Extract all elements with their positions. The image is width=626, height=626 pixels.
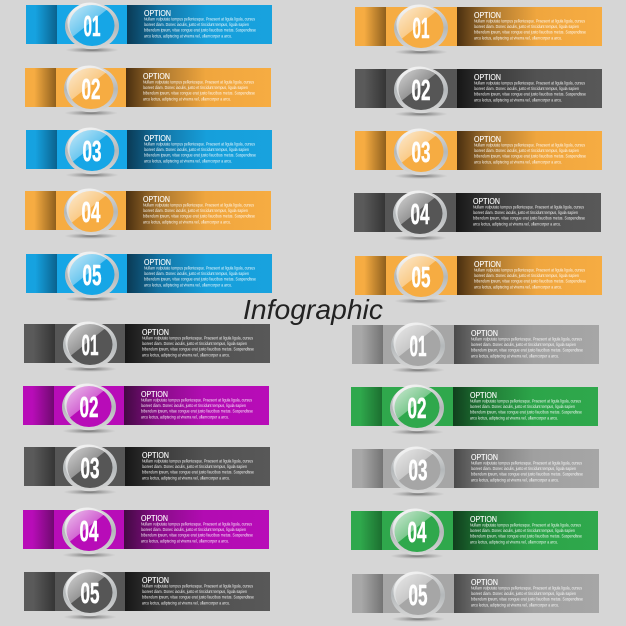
ribbon	[26, 5, 272, 44]
banner: gray 05 right	[352, 571, 599, 622]
badge shadow	[65, 296, 119, 302]
text block: arcu lectus, adipiscing at viverra vel, ullamcorper a arcu.	[144, 33, 232, 38]
text block	[474, 73, 586, 102]
text block	[474, 11, 586, 40]
ribbon	[23, 510, 269, 549]
number badge: 01	[82, 330, 98, 362]
text block: Nullam vulputate tempus pellentesque. Praesent at ligula ligula, cursus	[474, 80, 586, 85]
text block: OPTION	[470, 391, 497, 400]
text block: arcu lectus, adipiscing at viverra vel, ullamcorper a arcu.	[142, 600, 230, 605]
number badge	[394, 66, 448, 113]
banner: green 04 right	[351, 508, 598, 559]
ribbon	[354, 193, 601, 232]
ribbon	[352, 449, 599, 488]
banner: blue 01	[26, 2, 272, 53]
text block: bibendum ipsum, vitae congue erat justo faucibus metus. Suspendisse	[471, 348, 583, 353]
number badge: 04	[410, 199, 430, 231]
number badge: 01	[410, 331, 426, 363]
text block	[143, 195, 255, 224]
text block: laoreet diam. Donec iaculis, justo et tincidunt tempus, ligula sapien	[144, 147, 249, 152]
text block	[470, 515, 582, 544]
number badge: 04	[80, 516, 98, 548]
text block: arcu lectus, adipiscing at viverra vel, ullamcorper a arcu.	[143, 219, 231, 224]
text block: Nullam vulputate tempus pellentesque. Praesent at ligula ligula, cursus	[474, 142, 586, 147]
number badge	[62, 383, 116, 430]
number badge: 03	[408, 455, 428, 487]
number badge	[391, 322, 445, 369]
ribbon	[24, 447, 270, 486]
text block: OPTION	[471, 578, 498, 587]
text block: OPTION	[474, 73, 501, 82]
text block: bibendum ipsum, vitae congue erat justo faucibus metus. Suspendisse	[144, 28, 256, 33]
text block: bibendum ipsum, vitae congue erat justo faucibus metus. Suspendisse	[474, 30, 586, 35]
banner: purple 02	[23, 383, 269, 434]
banner: orange 03 right	[355, 128, 602, 179]
text block: arcu lectus, adipiscing at viverra vel, ullamcorper a arcu.	[474, 284, 562, 289]
ribbon	[351, 511, 598, 550]
badge shadow	[394, 111, 448, 117]
text block: Nullam vulputate tempus pellentesque. Praesent at ligula ligula, cursus	[142, 458, 254, 463]
text block: arcu lectus, adipiscing at viverra vel, ullamcorper a arcu.	[141, 538, 229, 543]
number badge: 02	[82, 74, 100, 106]
text block: arcu lectus, adipiscing at viverra vel, ullamcorper a arcu.	[141, 414, 229, 419]
text block: OPTION	[470, 515, 497, 524]
text block: Nullam vulputate tempus pellentesque. Praesent at ligula ligula, cursus	[144, 16, 256, 21]
badge shadow	[62, 428, 116, 434]
number badge: 01	[412, 13, 430, 45]
text block	[141, 514, 253, 543]
badge shadow	[63, 614, 117, 620]
text block: bibendum ipsum, vitae congue erat justo faucibus metus. Suspendisse	[473, 216, 585, 221]
number badge: 04	[408, 517, 426, 549]
banner: charcoal 04 right	[354, 190, 601, 241]
number badge	[393, 190, 447, 237]
text block: arcu lectus, adipiscing at viverra vel, ullamcorper a arcu.	[474, 35, 562, 40]
banner: charcoal 03	[24, 444, 270, 495]
text block: OPTION	[144, 9, 171, 18]
text block: OPTION	[143, 195, 170, 204]
banner: green 02 right	[351, 384, 598, 435]
text block: laoreet diam. Donec iaculis, justo et tincidunt tempus, ligula sapien	[474, 24, 579, 29]
text block: Nullam vulputate tempus pellentesque. Praesent at ligula ligula, cursus	[471, 460, 583, 465]
text block: Nullam vulputate tempus pellentesque. Praesent at ligula ligula, cursus	[470, 522, 582, 527]
number badge: 01	[84, 11, 100, 43]
number badge: 05	[408, 580, 428, 612]
text block: OPTION	[142, 328, 169, 337]
ribbon	[25, 68, 271, 107]
number badge: 05	[80, 578, 100, 610]
text block: bibendum ipsum, vitae congue erat justo faucibus metus. Suspendisse	[144, 277, 256, 282]
text block: laoreet diam. Donec iaculis, justo et tincidunt tempus, ligula sapien	[143, 208, 248, 213]
text block: bibendum ipsum, vitae congue erat justo faucibus metus. Suspendisse	[142, 347, 254, 352]
ribbon	[23, 386, 269, 425]
text block: laoreet diam. Donec iaculis, justo et tincidunt tempus, ligula sapien	[471, 342, 576, 347]
badge shadow	[63, 366, 117, 372]
text block: laoreet diam. Donec iaculis, justo et tincidunt tempus, ligula sapien	[471, 466, 576, 471]
text block: arcu lectus, adipiscing at viverra vel, ullamcorper a arcu.	[471, 353, 559, 358]
badge shadow	[391, 616, 445, 622]
text block: OPTION	[144, 258, 171, 267]
text block: arcu lectus, adipiscing at viverra vel, ullamcorper a arcu.	[470, 539, 558, 544]
text block: arcu lectus, adipiscing at viverra vel, ullamcorper a arcu.	[473, 221, 561, 226]
text block: arcu lectus, adipiscing at viverra vel, ullamcorper a arcu.	[143, 96, 231, 101]
badge shadow	[393, 235, 447, 241]
banner: charcoal 02 right	[355, 66, 602, 117]
text block: laoreet diam. Donec iaculis, justo et tincidunt tempus, ligula sapien	[143, 85, 248, 90]
ribbon	[352, 574, 599, 613]
text block: laoreet diam. Donec iaculis, justo et tincidunt tempus, ligula sapien	[142, 589, 247, 594]
ribbon	[24, 324, 270, 363]
text block	[143, 72, 255, 101]
text block: bibendum ipsum, vitae congue erat justo faucibus metus. Suspendisse	[474, 92, 586, 97]
text block: bibendum ipsum, vitae congue erat justo faucibus metus. Suspendisse	[144, 153, 256, 158]
text block: laoreet diam. Donec iaculis, justo et tincidunt tempus, ligula sapien	[144, 22, 249, 27]
text block: arcu lectus, adipiscing at viverra vel, ullamcorper a arcu.	[474, 97, 562, 102]
text block: OPTION	[471, 329, 498, 338]
text block: arcu lectus, adipiscing at viverra vel, ullamcorper a arcu.	[142, 475, 230, 480]
banner: blue 05	[26, 251, 272, 302]
banner: orange 02	[25, 65, 271, 116]
badge shadow	[64, 233, 118, 239]
number badge	[64, 188, 118, 235]
text block: arcu lectus, adipiscing at viverra vel, ullamcorper a arcu.	[471, 477, 559, 482]
banner: blue 03	[26, 127, 272, 178]
text block: Nullam vulputate tempus pellentesque. Praesent at ligula ligula, cursus	[144, 265, 256, 270]
text block: OPTION	[142, 576, 169, 585]
text block: Nullam vulputate tempus pellentesque. Praesent at ligula ligula, cursus	[142, 583, 254, 588]
text block: Nullam vulputate tempus pellentesque. Praesent at ligula ligula, cursus	[474, 267, 586, 272]
text block: arcu lectus, adipiscing at viverra vel, ullamcorper a arcu.	[474, 159, 562, 164]
text block: arcu lectus, adipiscing at viverra vel, ullamcorper a arcu.	[471, 602, 559, 607]
badge shadow	[65, 47, 119, 53]
text block: Nullam vulputate tempus pellentesque. Praesent at ligula ligula, cursus	[143, 202, 255, 207]
number badge	[391, 571, 445, 618]
ribbon	[352, 325, 599, 364]
text block: Nullam vulputate tempus pellentesque. Praesent at ligula ligula, cursus	[141, 521, 253, 526]
number badge: 03	[80, 453, 100, 485]
text block: bibendum ipsum, vitae congue erat justo faucibus metus. Suspendisse	[141, 533, 253, 538]
text block: laoreet diam. Donec iaculis, justo et tincidunt tempus, ligula sapien	[142, 464, 247, 469]
text block: Nullam vulputate tempus pellentesque. Praesent at ligula ligula, cursus	[474, 18, 586, 23]
text block: laoreet diam. Donec iaculis, justo et tincidunt tempus, ligula sapien	[142, 341, 247, 346]
text block: bibendum ipsum, vitae congue erat justo faucibus metus. Suspendisse	[471, 597, 583, 602]
badge shadow	[394, 173, 448, 179]
text block	[142, 328, 254, 357]
number badge	[64, 65, 118, 112]
badge shadow	[390, 429, 444, 435]
number badge	[63, 569, 117, 616]
text block: bibendum ipsum, vitae congue erat justo faucibus metus. Suspendisse	[142, 470, 254, 475]
text block: OPTION	[471, 453, 498, 462]
text block	[144, 9, 256, 38]
badge shadow	[391, 491, 445, 497]
number badge: 05	[82, 260, 102, 292]
ribbon	[355, 7, 602, 46]
number badge	[63, 321, 117, 368]
text block: Nullam vulputate tempus pellentesque. Praesent at ligula ligula, cursus	[144, 141, 256, 146]
number badge	[62, 507, 116, 554]
number badge	[391, 446, 445, 493]
badge shadow	[394, 49, 448, 55]
text block	[141, 390, 253, 419]
text block: bibendum ipsum, vitae congue erat justo faucibus metus. Suspendisse	[470, 534, 582, 539]
text block	[470, 391, 582, 420]
text block: OPTION	[143, 72, 170, 81]
text block	[474, 135, 586, 164]
number badge	[63, 444, 117, 491]
banner: purple 04	[23, 507, 269, 558]
text block: laoreet diam. Donec iaculis, justo et tincidunt tempus, ligula sapien	[474, 86, 579, 91]
text block: bibendum ipsum, vitae congue erat justo faucibus metus. Suspendisse	[470, 410, 582, 415]
number badge	[394, 4, 448, 51]
ribbon	[355, 69, 602, 108]
ribbon	[351, 387, 598, 426]
text block	[144, 134, 256, 163]
text block: arcu lectus, adipiscing at viverra vel, ullamcorper a arcu.	[142, 352, 230, 357]
text block: laoreet diam. Donec iaculis, justo et tincidunt tempus, ligula sapien	[474, 273, 579, 278]
ribbon	[355, 256, 602, 295]
badge shadow	[390, 553, 444, 559]
number badge	[65, 251, 119, 298]
number badge: 02	[408, 393, 426, 425]
badge shadow	[391, 367, 445, 373]
text block: laoreet diam. Donec iaculis, justo et tincidunt tempus, ligula sapien	[141, 527, 246, 532]
banner: orange 01 right	[355, 4, 602, 55]
text block: bibendum ipsum, vitae congue erat justo faucibus metus. Suspendisse	[474, 279, 586, 284]
banner: charcoal 05	[24, 569, 270, 620]
ribbon	[355, 131, 602, 170]
badge shadow	[65, 172, 119, 178]
number badge	[65, 127, 119, 174]
text block: OPTION	[142, 451, 169, 460]
number badge: 05	[412, 262, 430, 294]
text block	[144, 258, 256, 287]
text block: OPTION	[141, 514, 168, 523]
title: Infographic	[243, 294, 383, 325]
text block	[471, 578, 583, 607]
text block: laoreet diam. Donec iaculis, justo et tincidunt tempus, ligula sapien	[141, 403, 246, 408]
ribbon	[24, 572, 270, 611]
text block: laoreet diam. Donec iaculis, justo et tincidunt tempus, ligula sapien	[474, 148, 579, 153]
number badge	[390, 384, 444, 431]
text block: Nullam vulputate tempus pellentesque. Praesent at ligula ligula, cursus	[471, 336, 583, 341]
text block: Nullam vulputate tempus pellentesque. Praesent at ligula ligula, cursus	[473, 204, 585, 209]
text block: bibendum ipsum, vitae congue erat justo faucibus metus. Suspendisse	[471, 472, 583, 477]
banner: orange 04	[25, 188, 271, 239]
badge shadow	[62, 552, 116, 558]
number badge	[394, 253, 448, 300]
ribbon	[26, 254, 272, 293]
banner: charcoal 01	[24, 321, 270, 372]
banner: gray 01 right	[352, 322, 599, 373]
text block	[471, 329, 583, 358]
text block: bibendum ipsum, vitae congue erat justo faucibus metus. Suspendisse	[474, 154, 586, 159]
text block: bibendum ipsum, vitae congue erat justo faucibus metus. Suspendisse	[143, 91, 255, 96]
text block: OPTION	[141, 390, 168, 399]
banner: gray 03 right	[352, 446, 599, 497]
ribbon	[26, 130, 272, 169]
banner: orange 05 right	[355, 253, 602, 304]
text block: bibendum ipsum, vitae congue erat justo faucibus metus. Suspendisse	[143, 214, 255, 219]
number badge: 03	[82, 136, 102, 168]
text block	[142, 576, 254, 605]
text block	[471, 453, 583, 482]
number badge: 02	[80, 392, 98, 424]
text block: Nullam vulputate tempus pellentesque. Praesent at ligula ligula, cursus	[141, 397, 253, 402]
text block: laoreet diam. Donec iaculis, justo et tincidunt tempus, ligula sapien	[144, 271, 249, 276]
text block	[473, 197, 585, 226]
text block: arcu lectus, adipiscing at viverra vel, ullamcorper a arcu.	[144, 158, 232, 163]
text block: laoreet diam. Donec iaculis, justo et tincidunt tempus, ligula sapien	[473, 210, 578, 215]
number badge: 02	[412, 75, 430, 107]
text block: OPTION	[144, 134, 171, 143]
number badge: 04	[82, 197, 100, 229]
text block: OPTION	[474, 260, 501, 269]
text block: Nullam vulputate tempus pellentesque. Praesent at ligula ligula, cursus	[471, 585, 583, 590]
badge shadow	[64, 110, 118, 116]
number badge	[394, 128, 448, 175]
number badge: 03	[412, 137, 430, 169]
text block: Nullam vulputate tempus pellentesque. Praesent at ligula ligula, cursus	[470, 398, 582, 403]
text block	[142, 451, 254, 480]
text block: bibendum ipsum, vitae congue erat justo faucibus metus. Suspendisse	[142, 595, 254, 600]
text block: OPTION	[474, 11, 501, 20]
number badge	[390, 508, 444, 555]
text block: OPTION	[474, 135, 501, 144]
badge shadow	[394, 298, 448, 304]
text block: Nullam vulputate tempus pellentesque. Praesent at ligula ligula, cursus	[142, 335, 254, 340]
text block	[474, 260, 586, 289]
text block: bibendum ipsum, vitae congue erat justo faucibus metus. Suspendisse	[141, 409, 253, 414]
text block: laoreet diam. Donec iaculis, justo et tincidunt tempus, ligula sapien	[470, 404, 575, 409]
text block: OPTION	[473, 197, 500, 206]
text block: arcu lectus, adipiscing at viverra vel, ullamcorper a arcu.	[144, 282, 232, 287]
number badge	[65, 2, 119, 49]
ribbon	[25, 191, 271, 230]
text block: arcu lectus, adipiscing at viverra vel, ullamcorper a arcu.	[470, 415, 558, 420]
text block: laoreet diam. Donec iaculis, justo et tincidunt tempus, ligula sapien	[470, 528, 575, 533]
text block: Nullam vulputate tempus pellentesque. Praesent at ligula ligula, cursus	[143, 79, 255, 84]
text block: laoreet diam. Donec iaculis, justo et tincidunt tempus, ligula sapien	[471, 591, 576, 596]
badge shadow	[63, 489, 117, 495]
